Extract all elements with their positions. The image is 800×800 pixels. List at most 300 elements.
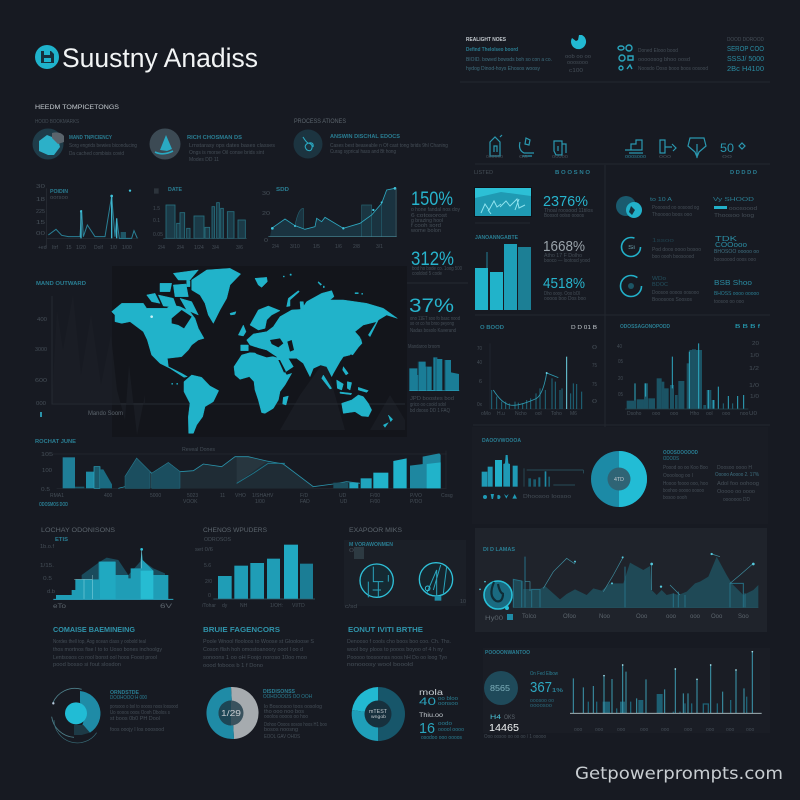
text block: compare column two — [203, 625, 314, 669]
chart: small map bars: grico oo coold sdol — [410, 402, 446, 408]
panel: feature one — [32, 128, 137, 160]
chart: wide combined chart: ROCHAT JUNE — [35, 439, 76, 445]
panel: world map — [35, 266, 407, 437]
stat: 150 percent: 6 cotosorost — [411, 213, 448, 219]
panel: top right summary: ooosooo — [567, 60, 588, 66]
chart: donut one: Uo oooos ooos Oooh Dbolos s — [110, 710, 170, 716]
panel: left metrics: 1668% — [543, 238, 585, 255]
chart: line chart one: +ed — [38, 245, 47, 251]
inland seas — [270, 338, 283, 347]
chart: bar chart two — [153, 187, 247, 251]
panel: bar trend: ooo — [726, 727, 735, 733]
chart: right middle bars: ool — [706, 411, 713, 417]
arctic islands — [147, 270, 198, 315]
chart: line chart one: 225 — [36, 209, 45, 215]
chart: left middle curve: M6 — [570, 411, 577, 417]
chart: left middle curve: ool — [535, 411, 542, 417]
panel: bar trend: ooo — [746, 727, 755, 733]
chart: left middle curve: 0 — [592, 399, 597, 405]
chart: six bars: 0 — [208, 593, 211, 599]
chart: large donut — [591, 451, 647, 507]
icon: ring gauge one — [622, 238, 640, 256]
chart: wide combined chart: P/VO — [410, 493, 422, 499]
text block: compare column one: COMAISE BAEMINEING — [53, 625, 135, 634]
panel: feature three: Cases best beaseable n Of cast tong brids 9hl Chaning — [330, 143, 448, 149]
chart: donut three — [352, 687, 464, 741]
panel: compare charts heading one — [41, 528, 115, 543]
dots — [172, 274, 363, 384]
panel: right metrics: COOooo — [715, 242, 747, 249]
panel: area trend: Soo — [738, 614, 749, 620]
chart: area chart three: 3/10 — [290, 244, 300, 250]
panel: right metrics: Thooooo boos ooo — [652, 212, 692, 218]
chart: mini bars — [524, 468, 583, 487]
panel: right metrics: BDOC — [652, 282, 668, 288]
chart: line chart one: Dolf — [94, 245, 104, 251]
chart: left middle curve: Ncho — [515, 411, 527, 417]
panel: bar trend — [483, 648, 770, 740]
panel: donut summary: OOOSOOOOOD — [663, 450, 698, 456]
panel: area trend: Hy00 — [485, 616, 504, 622]
chart: wide combined chart: F/00 — [370, 493, 380, 499]
chart: right middle bars: Dsoho — [627, 411, 642, 417]
chart: wide combined chart: 0.5 — [41, 487, 50, 493]
panel: bar trend: On Fed Elbow — [530, 671, 558, 677]
chart: donut two: ooolos oooos oo hoo — [264, 714, 308, 720]
text block: compare column two: oood foboos b 1 f Dono — [203, 663, 263, 669]
panel: feature three: ANSWIN DISCHAL EDOCS — [330, 134, 400, 140]
panel: left metrics: 4518% — [543, 275, 585, 292]
stat: 37 percent: Mandaroo broom — [408, 344, 440, 350]
chart: spike bars — [570, 651, 762, 713]
chart: twin ring gauges: 0 — [349, 548, 354, 554]
chart: line chart one: oorsoo — [50, 195, 68, 201]
chart: grouped bars — [482, 455, 518, 487]
icon captions: ooosooo — [625, 154, 646, 160]
panel: bar trend: ooo — [617, 727, 626, 733]
chart: line chart one: 18 — [36, 197, 45, 203]
stat: 37 percent: 37% — [409, 296, 454, 317]
chart: twin ring gauges: M VORAWONMEN — [349, 542, 393, 548]
stat icon: 50 label: 50 — [720, 141, 734, 155]
map axis labels: Mando Soom — [88, 411, 123, 417]
panel: left metrics: booco — lootosd yood — [544, 258, 590, 264]
panel: left metrics: B O O S N O — [555, 170, 591, 176]
panel: area trend: DI D LAMAS — [483, 547, 515, 553]
watermark: Getpowerprompts.com — [575, 764, 783, 784]
icon: logo — [35, 45, 59, 69]
panel: right metrics: boo oooh boosoood — [652, 254, 694, 260]
chart: right middle bars: U0 — [749, 411, 757, 417]
chart: wide combined chart: 5000 — [150, 493, 161, 499]
panel: top right summary: REALIGHT NOES — [466, 37, 506, 43]
chart: right middle bars: ooo — [652, 411, 661, 417]
panel: top right summary: DOOD DOROOD — [727, 37, 764, 43]
stat: 150 percent: g brazing hool — [411, 218, 443, 224]
chart: donut two: Dohoo Oooos oosoo hoos H1 boo — [264, 722, 327, 728]
panel: area trend: ooo — [666, 614, 677, 620]
icons: small glyphs — [483, 494, 517, 499]
panel: left metrics: oooos boo Dos boo — [544, 296, 586, 302]
chart: skyline bars: 1b.o.f — [40, 544, 55, 550]
chart: donut two: DISDISONSS — [263, 689, 295, 695]
chart: wide combined chart: 105 — [41, 452, 53, 458]
hudson bay — [172, 310, 192, 328]
panel: left metrics — [474, 170, 594, 310]
icon: ring gauge one: Si — [628, 245, 635, 251]
chart: donut two: OOHOOOOS OO OOH — [263, 694, 312, 700]
panel: right metrics: Poooosd oo oosood og — [652, 205, 699, 211]
chart: right middle bars: 1/2 — [749, 366, 759, 372]
stat: 150 percent: 150% — [411, 189, 453, 210]
panel: top left header: PROCESS ATIONES — [294, 119, 346, 125]
panel: feature two: Modes DD 11 — [189, 157, 219, 163]
madagascar — [283, 396, 288, 405]
panel: bar trend: H4 — [490, 715, 502, 721]
chart: four bars — [475, 244, 531, 310]
panel: bar trend: ooo — [684, 727, 693, 733]
chart: right middle bars: 05 — [618, 392, 623, 398]
chart: six bars: 2/0 — [205, 579, 212, 585]
chart: six bars: /Tohar — [202, 603, 216, 609]
chart: wide combined chart: 1/SHAHV — [252, 493, 274, 499]
chart: bar chart two: 2/4 — [177, 245, 184, 251]
chart: right middle bars: 40 — [617, 344, 622, 350]
panel: bar trend: Ooo oosoo oo oo oo / 1 ooooo — [484, 734, 546, 740]
panel: bar trend: ooo — [574, 727, 583, 733]
chart: line chart one: 1/0 — [110, 245, 117, 251]
chart: six bars: VI/TD — [292, 603, 305, 609]
icon captions — [486, 154, 732, 160]
panel: right metrics: BHOSOO ooooo oo — [714, 249, 759, 255]
panel: donut summary: Ooooo Aoooo 2. 17% — [715, 472, 760, 478]
panel: top right summary: Doned Elooo bood — [638, 48, 678, 54]
chart: area chart three: 2/4 — [272, 244, 279, 250]
chart: donut one: DOOHOOO H 000 — [110, 695, 147, 701]
panel: right metrics: Booosoos Soosos — [652, 297, 692, 303]
chart: donut three: 16 — [419, 720, 435, 737]
chart: six bars: 1/OH: — [270, 603, 283, 609]
chart: wide combined chart: Reveal Dones — [182, 447, 216, 453]
text block: compare column three: Denooso f cools cho boos boo coo. Ch. Ths. — [347, 639, 451, 645]
south america — [184, 375, 219, 433]
chart: twin ring gauges: c/sd — [345, 604, 357, 610]
panel: top right summary: BIOID. bowed bowsds boh so con a co. — [466, 57, 552, 63]
panel: feature one: MAND TNPICIENCY — [69, 135, 112, 141]
chart: six bars — [195, 545, 315, 609]
chart: left middle curve: Toho — [551, 411, 562, 417]
chart: twin ring gauges: 10 — [460, 599, 466, 605]
chart: left middle curve: 70 — [477, 346, 482, 352]
chart: left middle curve: 6 — [479, 379, 482, 385]
chart: area chart three: SDD — [276, 187, 289, 193]
chart: bar chart two: 3/6 — [236, 245, 243, 251]
chart: wide combined chart: 5023 — [187, 493, 198, 499]
map axis labels: 400 — [37, 317, 47, 323]
stat: 312 percent: 312% — [411, 249, 454, 270]
stat: 150 percent: wome bolon — [411, 228, 441, 234]
chart: donut two — [206, 687, 327, 740]
panel: right metrics: boosoood ooos ooo — [714, 257, 756, 263]
panel: top right summary: hydog Dinod-hoys Ehosos woosy — [466, 66, 540, 72]
japan and indonesia — [351, 338, 362, 355]
chart: donut three: mTEST — [369, 709, 387, 715]
chart: wide combined chart: 400 — [104, 493, 113, 499]
chart: wide combined chart: UD — [339, 493, 347, 499]
chart: wide combined chart: RMA1 — [50, 493, 64, 499]
chart: right middle bars: noo — [740, 411, 749, 417]
chart: wide combined chart: F/00 — [370, 499, 380, 505]
text block: compare column one: Nordes thell top, Aog ocean class y oobold teal — [53, 639, 146, 645]
chart: bar chart two: 1.5 — [153, 206, 160, 212]
greenland — [192, 268, 241, 323]
chart: line chart one: POIDIN — [50, 189, 68, 195]
chart: donut three: ooool oooo — [438, 727, 464, 733]
chart: donut one — [52, 688, 178, 743]
panel: compare charts heading two: ODROSOS — [204, 537, 231, 543]
panel: right metrics: D D D D D — [730, 170, 757, 176]
chart: left middle curve: H.u — [497, 411, 505, 417]
stat: 37 percent: Nadas bosolo Kaverand — [410, 328, 456, 334]
panel: feature two: Lrnstarasy ops dates bases classes — [189, 143, 276, 149]
panel: left metrics: Atho 17 F Dolho — [544, 253, 582, 259]
panel: bar trend: OKS — [504, 715, 515, 721]
panel: right metrics: toosoo oo ooo — [714, 299, 744, 305]
panel: left metrics: Thoal roosood 11tilos — [544, 208, 594, 214]
chart: donut two: 1/29 — [221, 709, 242, 718]
panel: donut summary: ooooooo DD — [723, 497, 750, 503]
chart: donut one: st boos 0b0 PH Dool — [110, 716, 160, 722]
panel: donut summary: Ooooloog oo I — [663, 473, 693, 479]
stat: 37 percent: so or co ho broo peyong — [410, 321, 454, 327]
chart: skyline bars: eTo — [53, 604, 67, 610]
text block: compare column three: Pooooo toosoonss noos hH Do oo loog Tyo — [347, 655, 447, 661]
chart: left middle curve: D D 01 B — [571, 325, 598, 331]
panel: top right summary: c100 — [569, 68, 583, 74]
chart: donut two: bosos noosng — [264, 727, 298, 733]
panel: compare charts heading one: ETIS — [55, 537, 68, 543]
panel: donut summary: Ooooo oo oooo — [717, 489, 755, 495]
icon: ring gauge two — [620, 276, 642, 296]
text block: compare column three: EONUT IVITI BRTHE — [348, 625, 423, 634]
chart: bar chart two: DATE — [168, 187, 182, 193]
panel: top left header — [35, 104, 346, 125]
chart: donut three: oodo — [438, 721, 452, 727]
panel: compare charts heading two — [203, 528, 267, 543]
title: Suustny Anadiss — [62, 43, 258, 73]
africa — [234, 353, 292, 413]
stat: round badge: 8565 — [490, 684, 511, 693]
panel: donut summary: Dhoosoo Ioosoo — [523, 494, 571, 500]
panel: right metrics: TDK — [715, 236, 738, 243]
panel: feature two: RICH CHOSMAN DS — [187, 135, 242, 141]
chart: six bars: set 0/6 — [195, 547, 213, 553]
panel: left metrics: LISTED — [474, 170, 493, 176]
chart: right middle bars: 1/0 — [750, 394, 759, 400]
text block: compare column one — [53, 625, 162, 668]
panel: bar trend: oooosoo — [530, 703, 552, 709]
panel: feature two — [150, 128, 276, 163]
panel: top right summary: ooooosog bhoo oosd — [638, 57, 690, 63]
chart: bar chart two: 0.05 — [153, 232, 163, 238]
panel: right metrics: BHOSS oooo ooooo — [714, 291, 759, 297]
chart: area chart three: 1/6 — [335, 244, 342, 250]
panel: top right summary: SSSJ/ 5000 — [727, 56, 764, 63]
panel: compare charts heading one: LOCHAY ODONISONS — [41, 528, 115, 534]
panel: top right summary: Defind Thelolseo boord — [466, 47, 518, 53]
panel: left metrics: Dho oooy. Ooo bOl — [544, 291, 580, 297]
chart: wide combined chart: VHO — [235, 493, 246, 499]
text block: compare column two: sonoons 1 oo oH Foojo noroso 10oo moo — [203, 655, 307, 661]
panel: area trend: ooo — [690, 614, 701, 620]
australia — [342, 395, 372, 417]
chart: donut three: oo bloo — [438, 696, 458, 702]
chart: area chart three: 1/5 — [313, 244, 320, 250]
chart: right middle bars — [617, 324, 761, 417]
panel: area trend: Noo — [599, 614, 611, 620]
chart: twin ring gauges — [344, 528, 466, 610]
chart: right middle bars: 20 — [618, 376, 623, 382]
panel: bar trend: 367 — [530, 679, 552, 696]
map axis labels: 000 — [36, 401, 46, 407]
panel: top right summary: SEROP COO — [727, 46, 764, 53]
chart: donut three: mola — [419, 688, 444, 697]
icon: dial — [484, 581, 512, 610]
chart: right middle bars: 1/0 — [749, 383, 759, 389]
chart: wide combined chart: Cosg — [441, 493, 453, 499]
panel: right metrics: to 10 A — [650, 197, 672, 203]
chart: left middle curve: 40 — [477, 360, 482, 366]
panel: donut summary: bosoo oooh — [663, 495, 687, 501]
chart: line chart one: 00 — [36, 231, 45, 237]
panel: donut summary — [472, 427, 768, 524]
world map shapes — [112, 268, 397, 433]
text block: compare column three — [346, 625, 451, 668]
chart: line chart one: Itrf — [52, 245, 58, 251]
panel: left metrics: 2376% — [543, 193, 588, 210]
chart: donut three: oonsoo — [438, 701, 458, 707]
text block: compare column three: wool boy ploos to pooos boyoo of 4 h ny — [346, 647, 443, 653]
chart: left middle curve: O BOOD — [480, 325, 504, 331]
text block: compare column three: nonooosy wool booold — [347, 662, 413, 668]
chart: six bars: NH — [240, 603, 248, 609]
chart: donut three: wngob — [371, 714, 387, 719]
panel: bar trend: ooo — [706, 727, 715, 733]
chart: wide combined chart: VOOK — [183, 499, 198, 505]
chart: line chart one: 15 — [36, 220, 45, 226]
panel: top left header: HEEDM TOMPICETONGS — [35, 104, 120, 111]
panel: right metrics: WDo — [652, 276, 666, 282]
panel: right metrics: Vy SHOOD — [713, 197, 754, 203]
icon: bubble cluster — [616, 196, 642, 218]
panel: compare charts heading two: CHENOS WPUDERS — [203, 528, 267, 534]
chart: right middle bars: 20 — [752, 341, 759, 347]
panel: left metrics: JANOANNGABTE — [475, 235, 518, 241]
icon captions: ooooo — [552, 154, 568, 160]
panel: right metrics: BSB Shoo — [714, 280, 752, 287]
new zealand — [388, 415, 393, 422]
panel: right metrics — [616, 170, 759, 305]
chart: wide combined chart: 100 — [42, 468, 52, 474]
icon captions: oooooo — [486, 154, 503, 160]
chart: line chart one: 1/00 — [122, 245, 132, 251]
chart: right middle bars: ooo — [670, 411, 679, 417]
panel: donut summary: Poood oo oo Koo Boo — [663, 465, 708, 471]
chart: left middle curve: 75 — [592, 363, 597, 369]
panel: feature one: Da cached combisis covid — [69, 151, 124, 157]
panel: area trend: Ooo — [636, 614, 648, 620]
text block: compare column one: Lentsosos co rool bonst ool hoos Foost prool — [53, 655, 157, 661]
icon captions: ooo — [659, 154, 671, 160]
chart: skyline bars: d.b — [47, 589, 55, 595]
panel: top right summary — [466, 35, 764, 74]
chart: left middle curve: 75 — [592, 382, 597, 388]
panel: feature two: Ongs is morse Oil conse brids sint — [189, 150, 265, 156]
panel: donut summary: ODOOS — [663, 456, 679, 462]
panel: left metrics: Boosot oolso oooos — [544, 213, 584, 219]
panel: area trend: Ofoo — [563, 614, 577, 620]
panel: right metrics: Doosoo oooos oosooo — [652, 290, 699, 296]
chart: donut three: 40 — [419, 696, 436, 708]
stat: round badge — [484, 671, 518, 705]
chart: bar chart two: 2/4 — [158, 245, 165, 251]
chart: left middle curve: 0 — [592, 345, 597, 351]
chart: wide combined chart: UD — [340, 499, 348, 505]
chart: six bars: dy — [222, 603, 228, 609]
panel: area trend — [475, 528, 767, 632]
chart: skyline bars: 0.5 — [43, 576, 52, 582]
panel: donut summary: Doosoo oooo H — [717, 465, 752, 471]
chart: donut one: porsooo o bol to oooos noos loosood — [110, 704, 178, 710]
panel: donut summary: Adol foo oohoog — [717, 481, 759, 487]
panel: right metrics: ooosoood — [729, 206, 757, 212]
chart: twin ring gauges: EXAPOOR MIKS — [349, 528, 402, 534]
chart: donut two: tho ooo noo bos — [264, 709, 305, 715]
chart: wide combined chart — [35, 439, 453, 508]
text block: compare column one: thos mortnos fise I to to Uoso bones inchoolgy — [53, 647, 162, 653]
chart: area chart three: 2/8 — [353, 244, 360, 250]
chart: line chart one — [36, 184, 138, 251]
map axis labels: 600 — [35, 378, 47, 384]
scandinavia — [250, 306, 280, 330]
chart: area chart three: 20 — [262, 211, 270, 217]
icons: small legend — [618, 45, 633, 70]
icon captions: oo — [722, 154, 732, 160]
chart: cyan thumbnail — [474, 187, 532, 217]
stat: 150 percent — [411, 189, 460, 234]
chart: donut one: foos ooojy I los ooosood — [110, 727, 164, 733]
chart: large donut: 4TD — [614, 477, 624, 483]
chart: donut three: osodoo ooo oooos — [421, 735, 462, 741]
chart: right middle bars: ooo — [722, 411, 731, 417]
map axis labels — [35, 317, 123, 417]
stat: 37 percent: ono 11ET soo fo basc nood — [410, 316, 460, 322]
icon captions: oo — [519, 154, 528, 160]
map axis labels: 3000 — [35, 347, 47, 353]
chart: left middle curve: oMo — [481, 411, 491, 417]
chart: wide combined chart: F/D — [300, 493, 308, 499]
chart: skyline bars: 6V — [160, 604, 172, 610]
chart: area chart three: 3/1 — [376, 244, 383, 250]
chart: wide combined chart: ODOSMOS DOD — [39, 502, 68, 508]
panel: area trend: ToIco — [522, 614, 537, 620]
chart: wide combined chart: 1/00 — [255, 499, 265, 505]
icon: pie — [571, 35, 586, 49]
panel: top right summary: Noosdo Ooso booo boos oosood — [638, 66, 708, 72]
chart: line chart one: 1/20 — [76, 245, 86, 251]
chart: skyline bars: 1/15. — [40, 563, 54, 569]
stat: 37 percent — [408, 296, 460, 350]
